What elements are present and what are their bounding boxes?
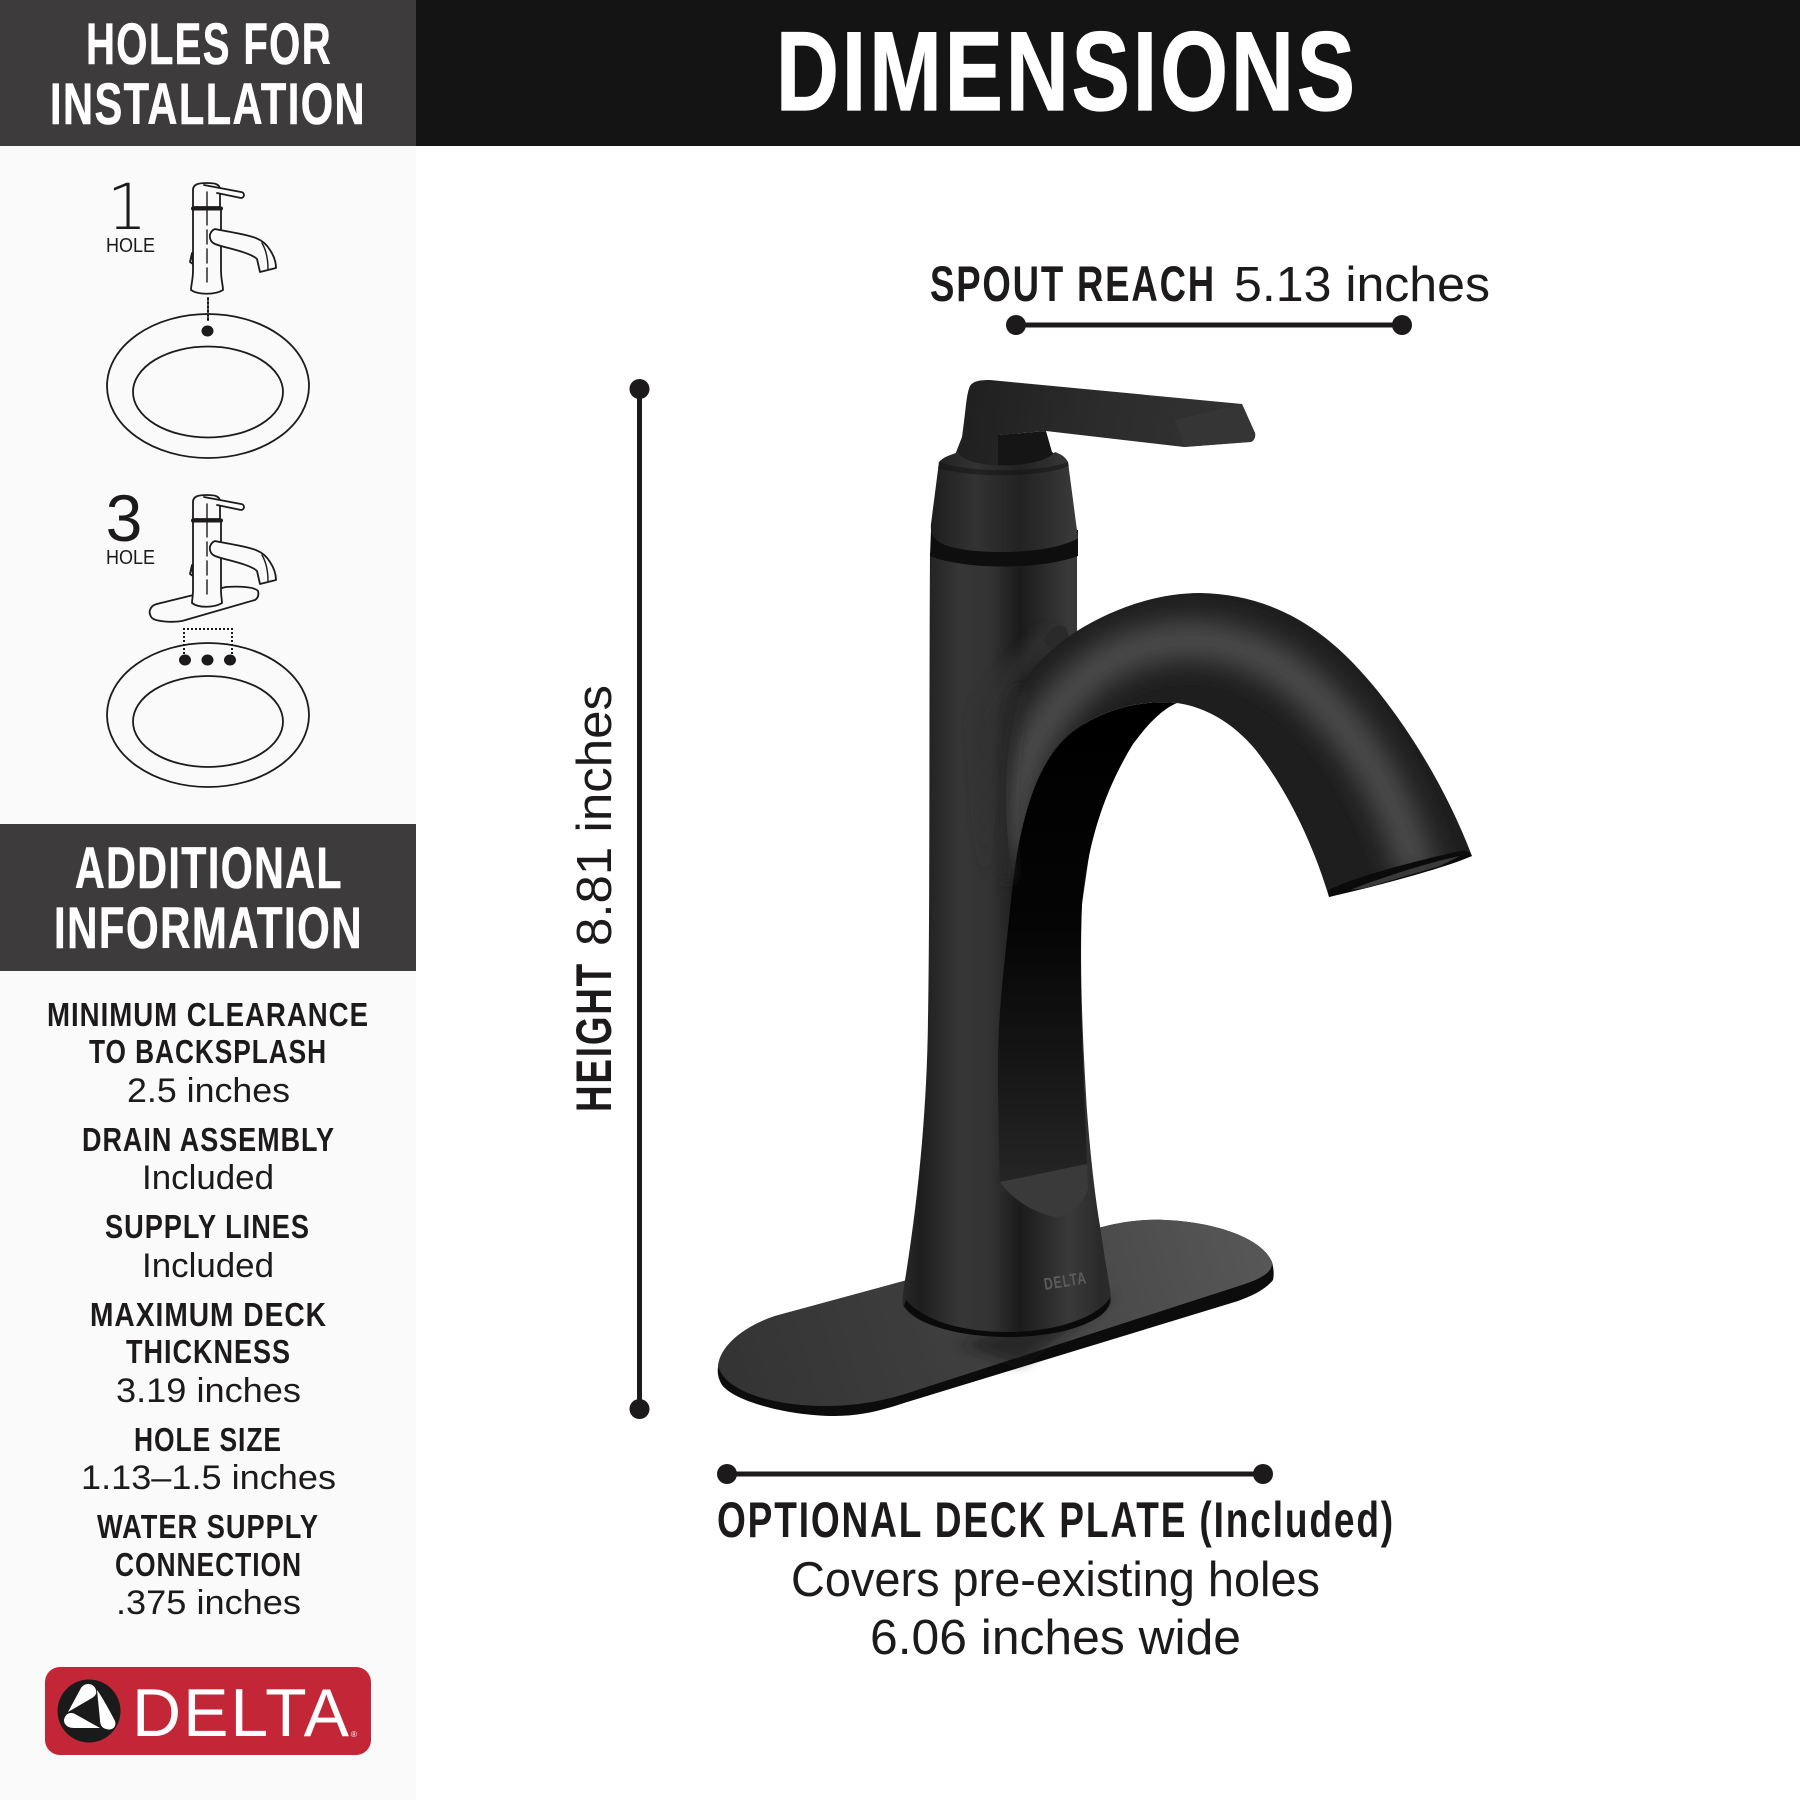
header: dimensions: DIMENSIONS	[776, 9, 1358, 134]
spec: minimum clearance	[47, 997, 369, 1110]
icon: sink three holes	[107, 629, 309, 787]
side sheen and spout	[973, 593, 1472, 897]
spec: drain assembly: DRAIN ASSEMBLY	[82, 1122, 335, 1159]
dimension: optional deck plate: 6.06 inches wide	[870, 1611, 1241, 1665]
dimension: optional deck plate: OPTIONAL DECK PLATE (Included)	[717, 1492, 1395, 1548]
panel: additional information	[0, 824, 416, 1622]
spec: supply lines: SUPPLY LINES	[105, 1209, 310, 1246]
spec: hole size: 1.13–1.5 inches	[81, 1459, 336, 1497]
spec: hole size: HOLE SIZE	[134, 1422, 282, 1459]
aerator mouth	[1328, 851, 1472, 897]
sidebar background	[0, 0, 416, 1800]
logo: delta: DELTA	[132, 1675, 350, 1751]
icon: sink one hole	[107, 314, 309, 458]
heading: additional information: ADDITIONAL	[75, 836, 343, 901]
icon: faucet with deck plate	[150, 495, 276, 622]
3 hole label: 3	[106, 481, 142, 555]
spec: minimum clearance: TO BACKSPLASH	[89, 1034, 327, 1071]
3 hole label: HOLE	[106, 547, 155, 569]
spec: water supply connection: .375 inches	[116, 1584, 301, 1622]
dimension: optional deck plate: Covers pre-existing holes	[791, 1553, 1320, 1607]
1 hole label	[106, 171, 155, 257]
spec: maximum deck thickness: 3.19 inches	[116, 1372, 301, 1410]
spec: drain assembly	[82, 1122, 335, 1197]
heading: holes for installation: INSTALLATION	[50, 72, 366, 137]
dimension: height: HEIGHT	[566, 962, 622, 1112]
1 hole label: 1	[107, 171, 147, 244]
header: dimensions	[416, 0, 1800, 146]
spec: supply lines: Included	[142, 1247, 274, 1285]
spec: maximum deck thickness: THICKNESS	[126, 1334, 291, 1371]
heading: additional information	[0, 824, 416, 971]
spec: water supply connection	[97, 1509, 319, 1622]
collar and handle	[930, 380, 1255, 566]
spec: water supply connection: WATER SUPPLY	[97, 1509, 319, 1546]
spec: drain assembly: Included	[142, 1159, 274, 1197]
dimension: optional deck plate	[717, 1464, 1395, 1665]
dimension: spout reach: 5.13 inches	[1234, 258, 1490, 312]
dimension: spout reach: SPOUT REACH	[930, 256, 1216, 312]
heading: additional information: INFORMATION	[54, 896, 363, 961]
engraved delta mark: DELTA	[1043, 1268, 1088, 1294]
heading: holes for installation: HOLES FOR	[86, 12, 332, 77]
faucet photo illustration	[718, 380, 1472, 1416]
faucet body and base	[903, 553, 1177, 1337]
1 hole label: HOLE	[106, 235, 155, 257]
spec: minimum clearance: 2.5 inches	[127, 1072, 290, 1110]
spec: maximum deck thickness	[90, 1297, 327, 1410]
logo: delta: ®	[351, 1730, 357, 1739]
panel: holes for installation	[0, 0, 416, 787]
spec: maximum deck thickness: MAXIMUM DECK	[90, 1297, 327, 1334]
dimension: height: 8.81 inches	[568, 685, 622, 946]
3 hole label	[106, 481, 155, 569]
inner dark channel	[998, 702, 1177, 1182]
spec: minimum clearance: MINIMUM CLEARANCE	[47, 997, 369, 1034]
icon: faucet one hole	[190, 183, 276, 322]
deck plate	[718, 1220, 1274, 1416]
logo: delta	[45, 1667, 371, 1755]
spec: hole size	[81, 1422, 336, 1497]
dimension: height	[566, 379, 650, 1419]
dimension: spout reach	[930, 256, 1490, 335]
spec: water supply connection: CONNECTION	[115, 1547, 302, 1584]
heading: holes for installation	[0, 0, 416, 146]
spec: supply lines	[105, 1209, 310, 1285]
deck notch	[1000, 1164, 1088, 1217]
